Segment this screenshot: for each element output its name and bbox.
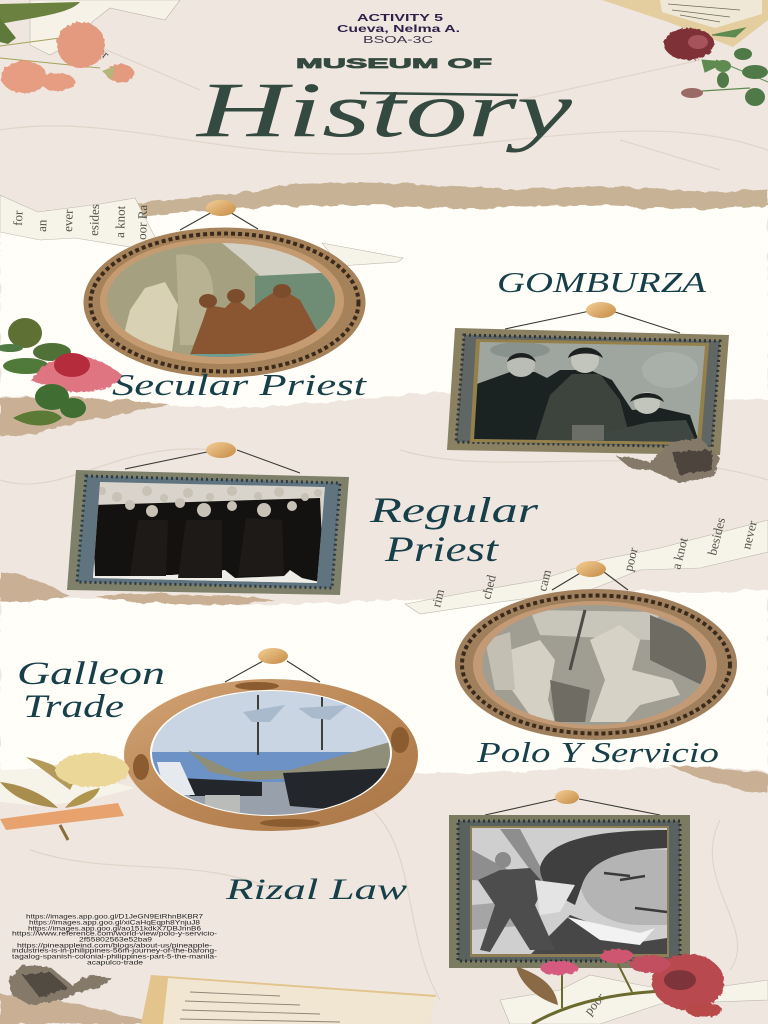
torn paper strip bottom right (500, 975, 768, 1024)
header credits: BSOA-3C (363, 34, 434, 46)
icon: moth near gomburza (616, 438, 720, 483)
header credits (337, 12, 460, 46)
torn paper strip secular priest: for (10, 210, 26, 226)
torn paper strip polo: cam (534, 568, 554, 593)
torn paper strip galleon (0, 768, 135, 806)
photo of three priests (470, 340, 710, 445)
pressed flower and tape (0, 753, 129, 840)
white band one (0, 205, 768, 407)
label: Secular Priest (112, 367, 368, 402)
oval frame (84, 228, 366, 378)
hanger (505, 302, 680, 333)
sources text: industries-is-in-philippines-56m-journey-of-the-barong- (12, 948, 217, 954)
panel: secular priest (84, 200, 368, 402)
sources text: acapulco-trade (87, 960, 144, 966)
torn paper strip polo: ched (478, 573, 499, 601)
flowers top left (0, 2, 134, 93)
sources text: 2f55802563e52ba9 (79, 938, 153, 944)
sources text: https://images.app.goo.gl/ao151kdkX7DBJnnB6 (28, 926, 202, 932)
rose left (0, 318, 122, 426)
panel: gomburza (447, 267, 729, 455)
header credits: ACTIVITY 5 (357, 12, 443, 24)
frame (447, 328, 729, 455)
sources text: https://pineappleind.com/blogs/about-us/pineapple- (17, 944, 212, 950)
torn paper strip secular priest (0, 195, 403, 266)
header credits: Cueva, Nelma A. (337, 23, 460, 35)
label (17, 656, 165, 725)
label: Trade (23, 689, 124, 725)
frame (67, 470, 349, 595)
torn paper strip top left (30, 0, 180, 62)
label: Rizal Law (225, 873, 407, 906)
torn paper strip polo: a knot (668, 536, 691, 571)
portrait of rizal (472, 828, 667, 955)
frame (449, 815, 690, 968)
panel: polo y servicio (455, 561, 737, 769)
title: history: History (195, 66, 573, 153)
rose top right (664, 28, 768, 106)
painting of friars (107, 243, 335, 357)
sources text (12, 914, 217, 966)
torn paper strip secular priest: esides (86, 204, 102, 236)
open book bottom (141, 975, 436, 1024)
label (369, 490, 539, 569)
label: GOMBURZA (497, 267, 706, 299)
label: Priest (384, 529, 499, 569)
torn paper strip secular priest: an (34, 219, 49, 232)
open book top right (602, 0, 768, 47)
torn paper strip polo: poor (620, 545, 641, 573)
sources text: tagalog-spanish-colonial-philippines-part-5-the-manila- (12, 954, 217, 960)
torn paper strip polo (405, 516, 768, 614)
sources text: https://www.reference.com/world-view/polo-y-servicio- (12, 932, 217, 938)
painting of ships (150, 690, 392, 817)
torn paper strip polo: besides (704, 516, 728, 557)
panel: rizal law (225, 790, 690, 968)
torn paper strip secular priest: oor Ra (134, 204, 150, 240)
sources text: https://images.app.goo.gl/xiCaHqEqph8YnjuJ8 (29, 920, 201, 926)
icon: moth bottom left (8, 965, 112, 1005)
white band two (0, 590, 768, 773)
hanger (552, 561, 628, 590)
brown torn patch left (0, 397, 170, 438)
torn paper strip secular priest: ever (60, 209, 76, 232)
engraving of labourers (480, 604, 712, 726)
title: museum of: MUSEUM OF (296, 55, 493, 71)
brown torn patches on band edges (0, 572, 768, 1024)
label: Regular (369, 490, 539, 530)
torn paper strip top left: a knot er (68, 21, 113, 62)
sources text: https://images.app.goo.gl/D1JeGN9EtRhnBKBR7 (26, 914, 204, 920)
oval frame (124, 679, 418, 831)
frame ornaments (133, 682, 409, 827)
hanger (125, 442, 300, 473)
hanger (485, 790, 660, 815)
pressed pink flower (516, 949, 724, 1024)
torn paper strip polo: rim (428, 588, 447, 609)
panel: galleon trade (17, 648, 418, 831)
hanger (180, 200, 258, 230)
panel: regular priest (67, 442, 539, 595)
oval frame (455, 589, 737, 740)
label: Polo Y Servicio (476, 738, 719, 769)
torn paper strip secular priest: a knot (112, 205, 128, 238)
photo of priests (90, 480, 330, 586)
hanger (225, 648, 320, 682)
torn brown strip top (40, 182, 768, 222)
label: Galleon (17, 656, 165, 692)
torn paper strip polo: never (738, 518, 760, 551)
torn paper strip bottom right: poor (581, 990, 608, 1018)
